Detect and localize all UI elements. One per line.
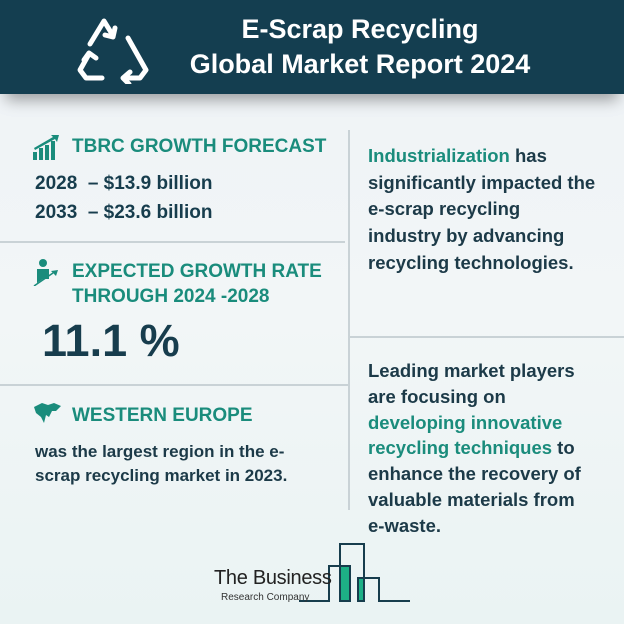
panel: industrialization: significantly impacted the [368,172,595,193]
panel: forecast [33,135,326,223]
text: scrap recycling market in 2023. [35,466,287,485]
panel: market players: Leading market players [368,360,575,381]
panel: market players: valuable materials from [368,489,575,510]
panel: market players: recycling techniques to [368,437,575,458]
panel: market players: e-waste. [368,515,441,536]
panel: industrialization: e-scrap recycling [368,198,520,219]
panel: industrialization: Industrialization has [368,145,547,166]
panel: industrialization: industry by advancing [368,225,564,246]
panel: market players: developing innovative [368,412,562,433]
header [0,0,624,94]
heading: THROUGH 2024 -2028 [72,286,269,307]
text: was the largest region in the e- [35,442,284,461]
title: E-Scrap Recycling [241,14,479,44]
values [35,173,212,223]
heading: WESTERN EUROPE [72,405,253,426]
text [35,442,287,485]
panel: region [34,403,287,485]
values: 2028 – $13.9 billion [35,173,212,194]
panel: industrialization: recycling technologies. [368,252,574,273]
heading [72,261,322,307]
value: 11.1 % [42,315,180,366]
logo [214,543,410,603]
values: 2033 – $23.6 billion [35,202,212,223]
panel: market players: enhance the recovery of [368,463,581,484]
heading: EXPECTED GROWTH RATE [72,261,322,282]
icon: person growth [34,259,58,286]
icon: recycle [78,18,148,84]
panel: market players [368,360,581,536]
panel: growth rate [34,259,322,366]
icon: map [34,403,61,423]
panel: market players: are focusing on [368,386,506,407]
heading: TBRC GROWTH FORECAST [72,136,326,157]
title [190,14,530,79]
logo: Research Company [221,592,309,603]
logo: The Business [214,567,332,589]
icon: bar chart [33,135,59,160]
panel: industrialization [368,145,595,273]
title: Global Market Report 2024 [190,49,530,79]
